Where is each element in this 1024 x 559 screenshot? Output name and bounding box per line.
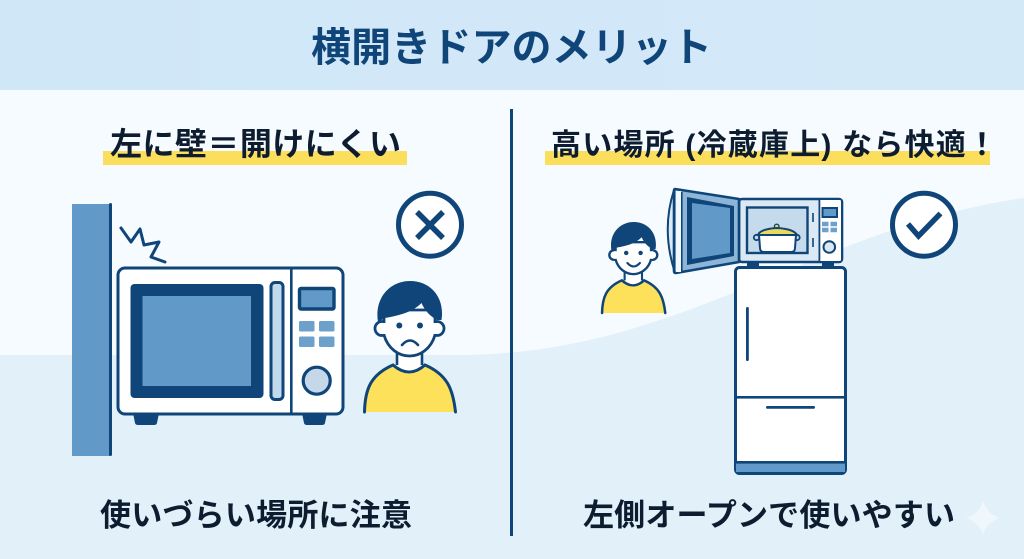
person: troubled [364,281,456,412]
header band [0,0,1024,90]
wall [72,203,112,456]
title: 横開きドアのメリット [311,26,712,70]
center divider [510,109,513,536]
panel: left, hard to open [72,126,462,533]
person: happy [602,222,665,313]
panel: right, comfortable on top of fridge [545,129,997,533]
icon: collision spark [121,228,165,262]
heading: left: 左に壁＝開けにくい [110,126,401,162]
caption: right: 左側オープンで使いやすい [583,498,955,533]
microwave door [668,189,739,273]
icon: sparkle [966,501,1000,535]
microwave with open door [668,189,842,273]
icon: cross mark [398,193,462,256]
heading: right: 高い場所 (冷蔵庫上) なら快適！ [551,129,997,162]
refrigerator [735,268,846,474]
microwave [118,268,343,425]
icon: check mark [892,193,956,256]
icon: pot [754,224,800,252]
caption: left: 使いづらい場所に注意 [100,498,412,533]
